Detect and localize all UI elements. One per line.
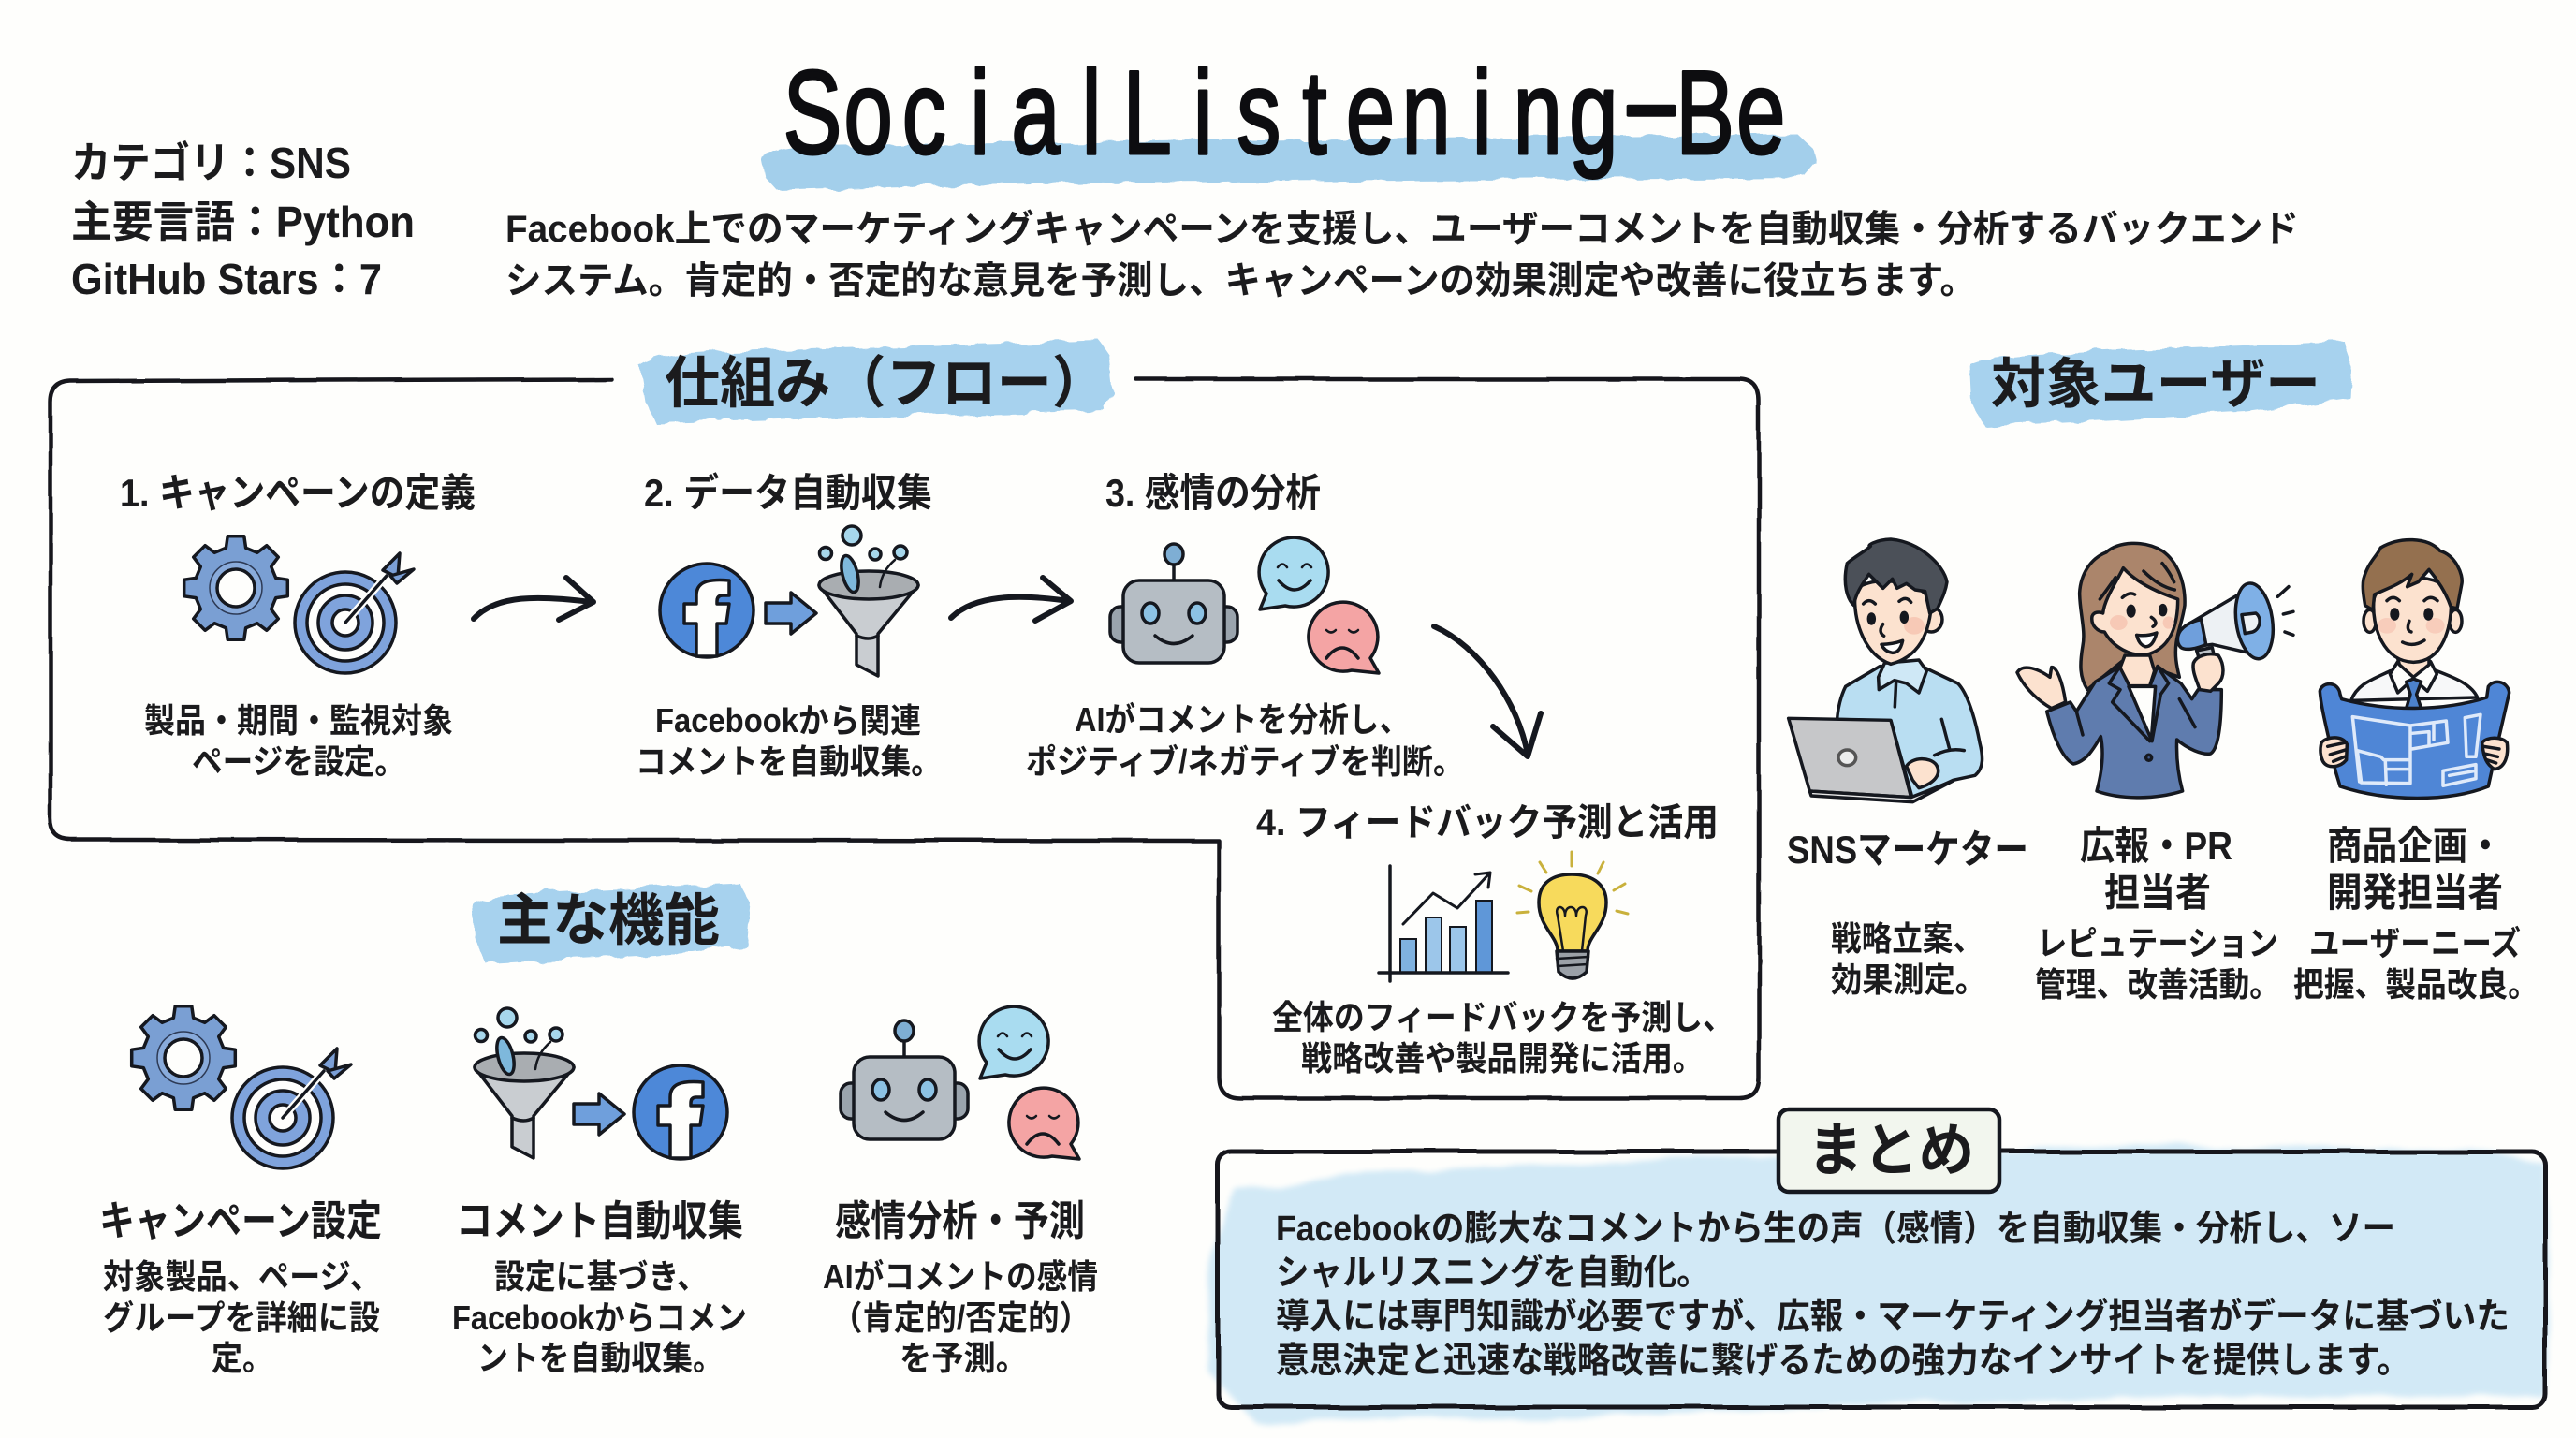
step 1: 1. キャンペーンの定義 [120, 471, 476, 515]
persona: product planner [2293, 540, 2539, 1004]
heading: target users: 対象ユーザー [1991, 354, 2320, 415]
title brush highlight [762, 134, 1818, 190]
icon: sad bubble [1009, 1088, 1079, 1159]
feature: sentiment analysis: を予測。 [900, 1339, 1028, 1377]
heading: features [472, 883, 751, 964]
feature: comment collection: Facebookからコメン [452, 1299, 747, 1337]
arrow: step 2 to 3 [951, 578, 1071, 621]
arrow: step 3 to 4 [1434, 626, 1541, 756]
persona: SNS marketer: SNSマーケター [1787, 828, 2028, 872]
step 2: Facebookから関連 [655, 701, 921, 740]
feature: sentiment analysis: AIがコメントの感情 [823, 1257, 1098, 1296]
step 2: コメントを自動収集。 [636, 742, 942, 781]
feature: sentiment analysis [823, 1006, 1098, 1377]
feature: comment collection: 設定に基づき、 [494, 1257, 708, 1296]
description: Facebook上でのマーケティングキャンペーンを支援し、ユーザーコメントを自動収集・分析するバックエンド [505, 209, 2299, 250]
summary watercolor wash [1209, 1146, 2548, 1421]
icon: sad bubble [1309, 602, 1379, 673]
meta info: カテゴリ：SNS [71, 139, 351, 187]
meta info: GitHub Stars：7 [71, 255, 382, 303]
icon: robot [1110, 544, 1237, 663]
step 4 [1256, 802, 1734, 1078]
panel: summary [1209, 1109, 2548, 1421]
icon: small arrow [574, 1093, 624, 1135]
step 1 [120, 471, 476, 781]
step 3 [1026, 471, 1464, 781]
feature: campaign settings: 定。 [212, 1339, 273, 1377]
title text: - [1620, 36, 1682, 169]
icon: happy bubble [1259, 537, 1328, 609]
persona: SNS marketer: 効果測定。 [1831, 961, 1986, 999]
feature: sentiment analysis: 感情分析・予測 [835, 1198, 1085, 1244]
step 1: 製品・期間・監視対象 [144, 701, 453, 740]
step 4: 全体のフィードバックを予測し、 [1272, 998, 1734, 1036]
illustration: woman with megaphone [2017, 543, 2293, 798]
panel: target users [1787, 342, 2539, 1004]
summary border [1218, 1152, 2545, 1407]
feature: comment collection: ントを自動収集。 [477, 1339, 724, 1377]
summary text [1276, 1210, 2510, 1381]
title text: SocialListening [783, 46, 1618, 179]
icon: bar chart [1379, 866, 1508, 981]
meta info: 主要言語：Python [71, 198, 415, 246]
summary text: シャルリスニングを自動化。 [1276, 1254, 1710, 1293]
icon: light bulb [1517, 852, 1628, 978]
feature: comment collection: コメント自動収集 [457, 1198, 743, 1244]
title [762, 36, 1818, 190]
icon: happy bubble [979, 1006, 1048, 1078]
summary tag [1778, 1109, 1999, 1192]
persona: product planner: 把握、製品改良。 [2293, 965, 2539, 1004]
feature: campaign settings: キャンペーン設定 [99, 1198, 382, 1244]
persona: SNS marketer: 戦略立案、 [1831, 919, 1983, 958]
summary tag: まとめ [1808, 1119, 1974, 1183]
feature: campaign settings: 対象製品、ページ、 [103, 1257, 381, 1296]
persona: PR staff: 管理、改善活動。 [2035, 965, 2280, 1004]
illustration: man with blueprint [2320, 540, 2510, 798]
heading: target users [1969, 342, 2351, 426]
meta info [71, 139, 415, 303]
step 3: 3. 感情の分析 [1105, 471, 1321, 515]
icon: small arrow [766, 593, 816, 634]
summary text: 導入には専門知識が必要ですが、広報・マーケティング担当者がデータに基づいた [1276, 1297, 2510, 1337]
description: システム。肯定的・否定的な意見を予測し、キャンペーンの効果測定や改善に役立ちます。 [505, 260, 1976, 301]
feature: comment collection [452, 1008, 747, 1377]
panel: flow [51, 341, 1759, 1098]
flow border [51, 379, 1759, 1098]
description [505, 209, 2299, 301]
icon: target [295, 553, 414, 673]
persona: product planner: 開発担当者 [2327, 871, 2503, 915]
illustration: man with laptop [1789, 539, 1983, 802]
step 3: ポジティブ/ネガティブを判断。 [1026, 742, 1464, 781]
arrow: step 1 to 2 [474, 578, 593, 620]
feature: campaign settings [99, 1006, 382, 1377]
step 2: 2. データ自動収集 [644, 471, 932, 515]
persona: PR staff [2017, 543, 2293, 1004]
icon: gear [132, 1006, 235, 1109]
step 2 [636, 471, 942, 781]
feature: sentiment analysis: （肯定的/否定的） [831, 1299, 1090, 1337]
summary text: 意思決定と迅速な戦略改善に繋げるための強力なインサイトを提供します。 [1276, 1342, 2410, 1381]
summary text: Facebookの膨大なコメントから生の声（感情）を自動収集・分析し、ソー [1276, 1210, 2395, 1249]
persona: SNS marketer [1787, 539, 2028, 999]
icon: target [232, 1049, 351, 1168]
icon: robot [841, 1020, 968, 1139]
title text: Be [1676, 46, 1785, 179]
step 1: ページを設定。 [192, 742, 405, 781]
icon: facebook [634, 1065, 727, 1159]
panel: features [99, 883, 1098, 1377]
feature: campaign settings: グループを詳細に設 [103, 1299, 380, 1337]
icon: gear [184, 536, 287, 639]
persona: PR staff: レピュテーション [2037, 924, 2278, 962]
icon: funnel [475, 1008, 574, 1158]
step 4: 4. フィードバック予測と活用 [1256, 802, 1719, 844]
heading: flow: 仕組み（フロー） [665, 352, 1107, 415]
persona: product planner: ユーザーニーズ [2309, 924, 2521, 962]
step 4: 戦略改善や製品開発に活用。 [1301, 1039, 1704, 1078]
persona: PR staff: 担当者 [2104, 871, 2211, 915]
step 3: AIがコメントを分析し、 [1075, 700, 1410, 739]
persona: product planner: 商品企画・ [2327, 824, 2503, 868]
icon: funnel [819, 526, 918, 676]
persona: PR staff: 広報・PR [2080, 824, 2232, 868]
heading: features: 主な機能 [497, 889, 720, 952]
icon: facebook [660, 564, 754, 657]
